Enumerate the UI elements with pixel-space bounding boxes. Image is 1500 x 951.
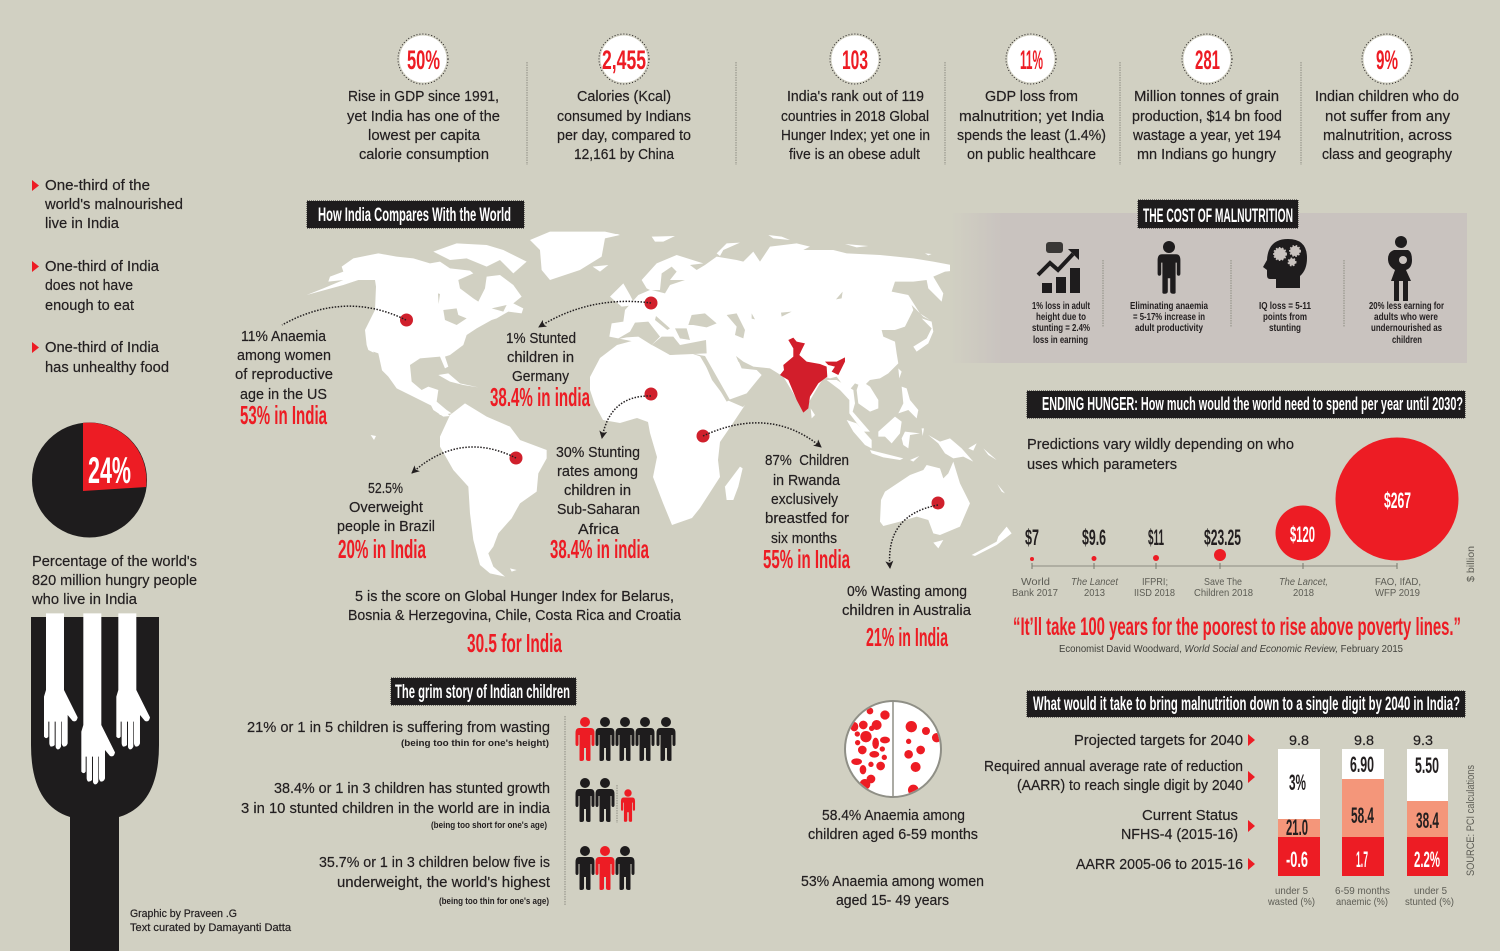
fact: unhealthy food: One-third of India: [45, 340, 160, 356]
fact: malnourished: One-third of the: [45, 178, 150, 194]
map callout: Rwanda: 55% in India: [763, 544, 850, 574]
bubble chart: $267: [1384, 488, 1411, 513]
map callout: Rwanda: six months: [771, 531, 837, 547]
bubble chart: 2018: [1293, 587, 1314, 599]
icons: 1 in 3 stunted: [576, 778, 635, 823]
credits: [130, 908, 291, 934]
bubble chart: FAO, IfAD,: [1375, 576, 1421, 588]
pie caption: 820 million hungry people: [32, 573, 197, 589]
text: stunted: 38.4% or 1 in 3 children has stunted growth: [274, 781, 550, 797]
stat: 9%: [1315, 34, 1459, 163]
map callout: Rwanda: exclusively: [771, 492, 839, 508]
cost text: anaemia: [1130, 300, 1208, 334]
stat: 281: Million tonnes of grain: [1134, 89, 1279, 105]
world map: [307, 232, 1012, 577]
stat: 2,455: per day, compared to: [557, 128, 691, 144]
stacked bars: 1.7: [1356, 847, 1368, 872]
fact: not enough to eat: One-third of India: [45, 259, 160, 275]
bubble chart: $120: [1290, 522, 1315, 547]
icon: head with gears: [1263, 239, 1307, 288]
stat: 103: [781, 34, 930, 163]
text: stunted: 3 in 10 stunted children in the world are in india: [241, 801, 551, 817]
fact: malnourished: [32, 178, 183, 232]
cost text: height: loss in earning: [1033, 334, 1088, 346]
stat: 103: 103: [842, 45, 868, 75]
map callout: Sub-Saharan Africa: rates among: [557, 464, 638, 480]
map callout: Sub-Saharan Africa: 38.4% in india: [550, 534, 649, 564]
cost text: height: height due to: [1036, 311, 1086, 323]
bubble chart: The Lancet: [1071, 576, 1119, 588]
stat: 50%: [347, 34, 500, 163]
text: stunted: (being too short for one's age): [431, 820, 547, 831]
pie caption: who live in India: [31, 592, 138, 608]
stat: 50%: 50%: [407, 45, 440, 75]
map callout: Australia: [842, 584, 972, 652]
map callout: Sub-Saharan Africa: 30% Stunting: [556, 445, 640, 461]
map callout: US: 11% Anaemia: [241, 329, 327, 345]
map callout: Brazil: 52.5%: [368, 481, 403, 497]
stacked bars: 9.3: [1413, 733, 1433, 748]
stat: 11%: on public healthcare: [967, 147, 1096, 163]
map callout: Australia: 21% in India: [866, 622, 948, 652]
stat: 9%: class and geography: [1322, 147, 1453, 163]
pie chart: 24%: [32, 422, 147, 538]
stat: 2,455: 12,161 by China: [574, 147, 675, 163]
stacked bars: 58.4: [1351, 803, 1374, 828]
map callout: Brazil: [337, 481, 435, 564]
panel: single digit by 2040: [984, 691, 1477, 908]
text: anaemia in women: aged 15- 49 years: [836, 893, 949, 909]
map callout: Germany: [490, 331, 590, 412]
stacked bars: 9.8: [1289, 733, 1309, 748]
cost text: height: stunting = 2.4%: [1032, 322, 1090, 334]
cost text: earnings: [1369, 300, 1444, 346]
icon: fork with reaching hands: [31, 613, 159, 951]
callout: Global Hunger Index: 5 is the score on Global Hunger Index for Belarus,: [355, 589, 674, 605]
map callout: Australia: children in Australia: [842, 603, 972, 619]
stat: 103: India's rank out of 119: [787, 89, 924, 105]
stat: 281: wastage a year, yet 194: [1132, 128, 1281, 144]
stat: 50%: lowest per capita: [368, 128, 481, 144]
stacked bars: 21.0: [1286, 815, 1308, 840]
bar labels: [1267, 885, 1454, 908]
bubble chart: IFPRI;: [1142, 576, 1168, 588]
panel: top statistics: [347, 34, 1459, 163]
stat: 11%: [957, 34, 1106, 163]
stat: 11%: GDP loss from: [985, 89, 1078, 105]
row labels: Projected targets for 2040: [1074, 733, 1243, 749]
row labels: Current Status: [1142, 808, 1238, 824]
icons: 1 in 5 people: [576, 717, 676, 761]
stat: 11%: spends the least (1.4%): [957, 128, 1106, 144]
credits: Text curated by Damayanti Datta: [130, 922, 291, 934]
icon: person: [1158, 241, 1180, 294]
stat: 281: mn Indians go hungry: [1137, 147, 1277, 163]
map: Africa: [590, 338, 745, 525]
cost text: height: [1032, 300, 1090, 346]
bubble chart: WFP 2019: [1375, 587, 1420, 599]
pie caption: [31, 554, 197, 608]
heading: How India Compares: [307, 201, 524, 228]
fact: malnourished: live in India: [45, 216, 120, 232]
bubble chart: [1012, 438, 1477, 599]
map callout: Rwanda: [763, 453, 850, 574]
stacked bars: 38.4: [1416, 808, 1439, 833]
text: wasting: (being too thin for one's height): [401, 738, 549, 749]
cost text: earnings: 20% less earning for: [1369, 300, 1444, 312]
stacked bars: 5.50: [1415, 753, 1439, 778]
stat: 9%: not suffer from any: [1325, 109, 1451, 125]
icon: chart with arrow and coins: [1038, 242, 1080, 293]
text: underweight: (being too thin for one's age): [439, 896, 549, 907]
text: underweight: [319, 855, 550, 907]
stat: 11%: 11%: [1020, 45, 1043, 75]
text: anaemia in women: 53% Anaemia among women: [801, 874, 984, 890]
panel: grim story of Indian children: [241, 678, 676, 907]
text: underweight: underweight, the world's highest: [337, 875, 550, 891]
icons: 1 in 3 underweight: [576, 846, 634, 890]
bar labels: 6-59 months: [1335, 885, 1390, 897]
bar labels: anaemic (%): [1336, 896, 1388, 908]
map callout: Brazil: people in Brazil: [337, 519, 435, 535]
heading: cost: THE COST OF MALNUTRITION: [1143, 206, 1293, 227]
row labels: Required annual average rate of reduction: [984, 759, 1243, 775]
map callout: Germany: 1% Stunted: [506, 331, 576, 347]
bar labels: under 5: [1275, 885, 1308, 897]
stat: 2,455: [557, 34, 691, 163]
row labels: [984, 733, 1255, 873]
map callout: US: 53% in India: [240, 400, 327, 430]
cost text: IQ: [1259, 300, 1311, 334]
map callout: Germany: Germany: [512, 369, 570, 385]
quote: [1013, 613, 1461, 655]
stat: 103: countries in 2018 Global: [781, 109, 929, 125]
fact: not enough to eat: does not have: [45, 278, 133, 294]
cost text: IQ: points from: [1263, 311, 1307, 323]
row labels: (AARR) to reach single digit by 2040: [1017, 778, 1243, 794]
map callout: Australia: 0% Wasting among: [847, 584, 967, 600]
bubble chart: $ billion: [1465, 546, 1477, 582]
stat: 2,455: 2,455: [602, 45, 646, 75]
fact: not enough to eat: [32, 259, 160, 314]
panel: ending hunger: [1012, 391, 1477, 655]
fact: malnourished: world's malnourished: [44, 197, 183, 213]
map markers and arrows: [282, 296, 944, 568]
stacked bars: 3%: [1289, 770, 1306, 795]
source: SOURCE: PCI calculations: [1465, 765, 1477, 876]
stat: 9%: Indian children who do: [1315, 89, 1459, 105]
text: anaemia in children: children aged 6-59 months: [808, 827, 978, 843]
quote: Economist David Woodward, World Social and Economic Review, February 2015: [1059, 643, 1403, 655]
cost text: height: 1% loss in adult: [1032, 300, 1090, 312]
panel: one-third facts: [32, 178, 183, 376]
heading: cost: [1138, 200, 1298, 228]
map callout: US: of reproductive: [235, 367, 333, 383]
text: stunted: [241, 781, 551, 831]
heading: grim story: The grim story of Indian children: [395, 682, 570, 703]
heading: grim story: [391, 678, 576, 705]
stat: 50%: Rise in GDP since 1991,: [348, 89, 499, 105]
stacked bars: 2.2%: [1414, 847, 1440, 872]
stat: 11%: malnutrition; yet India: [959, 109, 1105, 125]
stacked bars: 9.8: [1354, 733, 1374, 748]
cost text: anaemia: adult productivity: [1135, 322, 1203, 334]
map: southeast Asia and Oceania: [811, 380, 1012, 556]
text: wasting: [247, 720, 550, 749]
map callout: Sub-Saharan Africa: Sub-Saharan: [557, 502, 640, 518]
map callout: Germany: 38.4% in india: [490, 382, 590, 412]
cost text: earnings: undernourished as: [1371, 322, 1442, 334]
icon: blood cells comparison: [845, 701, 941, 797]
map callout: US: [235, 329, 333, 430]
stat: 281: 281: [1195, 45, 1220, 75]
cost text: IQ: stunting: [1269, 322, 1301, 334]
cost text: anaemia: = 5-17% increase in: [1133, 311, 1205, 323]
text: anaemia in children: [808, 808, 978, 843]
stat: 50%: calorie consumption: [359, 147, 489, 163]
bubble chart: World: [1021, 576, 1050, 588]
bar labels: under 5: [1414, 885, 1447, 897]
intro text: uses which parameters: [1027, 457, 1177, 473]
callout: Global Hunger Index: [348, 589, 682, 658]
bubble chart: The Lancet,: [1279, 576, 1328, 588]
stat: 281: production, $14 bn food: [1132, 109, 1282, 125]
icon: mother with child: [1388, 236, 1412, 301]
row labels: AARR 2005-06 to 2015-16: [1076, 857, 1243, 873]
map callout: US: among women: [237, 348, 331, 364]
bubble chart: Children 2018: [1194, 587, 1253, 599]
map callout: Brazil: 20% in India: [338, 534, 426, 564]
panel: cost of malnutrition: [950, 200, 1467, 363]
stat: 9%: malnutrition, across: [1323, 128, 1452, 144]
bubble chart: Save The: [1204, 576, 1242, 588]
map callout: Sub-Saharan Africa: children in: [564, 483, 631, 499]
map callout: Rwanda: in Rwanda: [773, 473, 841, 489]
intro text: [1027, 437, 1294, 473]
stat: 2,455: Calories (Kcal): [577, 89, 671, 105]
heading: How India Compares: How India Compares With the World: [318, 205, 511, 226]
bubble chart: $23.25: [1204, 525, 1241, 550]
intro text: Predictions vary wildly depending on who: [1027, 437, 1294, 453]
bar labels: wasted (%): [1267, 896, 1315, 908]
credits: Graphic by Praveen .G: [130, 908, 237, 920]
stacked bars: 6.90: [1350, 752, 1374, 777]
map callout: Sub-Saharan Africa: Africa: [578, 522, 620, 538]
bubble chart: Bank 2017: [1012, 587, 1058, 599]
pie chart: 24%: 24%: [88, 450, 131, 491]
bubble chart: IISD 2018: [1134, 587, 1175, 599]
stacked bars: -0.6: [1286, 847, 1308, 872]
map callout: Brazil: Overweight: [349, 500, 423, 516]
cost text: earnings: children: [1392, 334, 1422, 346]
stacked bars: [1278, 733, 1448, 876]
bubble chart: $7: [1025, 525, 1039, 550]
fact: unhealthy food: [32, 340, 169, 376]
bubble chart: 2013: [1084, 587, 1105, 599]
map: India in red: [780, 338, 845, 413]
map callout: Rwanda: breastfed for: [765, 511, 849, 527]
bar labels: stunted (%): [1405, 896, 1454, 908]
stat: 103: five is an obese adult: [789, 147, 920, 163]
fact: not enough to eat: enough to eat: [45, 298, 134, 314]
text: underweight: 35.7% or 1 in 3 children below five is: [319, 855, 550, 871]
map callout: Sub-Saharan Africa: [550, 445, 649, 564]
row labels: NFHS-4 (2015-16): [1121, 827, 1238, 843]
cost text: IQ: IQ loss = 5-11: [1259, 300, 1311, 312]
text: anaemia in children: 58.4% Anaemia among: [822, 808, 965, 824]
bubble chart: $11: [1148, 525, 1164, 550]
callout: Global Hunger Index: Bosnia & Herzegovina, Chile, Costa Rica and Croatia: [348, 608, 682, 624]
fact: unhealthy food: has unhealthy food: [45, 360, 169, 376]
stat: 2,455: consumed by Indians: [557, 109, 691, 125]
callout: Global Hunger Index: 30.5 for India: [467, 628, 562, 658]
stat: 103: Hunger Index; yet one in: [781, 128, 930, 144]
map callout: Rwanda: 87% Children: [765, 453, 849, 469]
bubble chart: $9.6: [1082, 525, 1106, 550]
stat: 281: [1132, 34, 1282, 163]
text: anaemia in women: [801, 874, 984, 909]
stat: 50%: yet India has one of the: [347, 109, 500, 125]
cost text: anaemia: Eliminating anaemia: [1130, 300, 1208, 312]
text: wasting: 21% or 1 in 5 children is suffering from wasting: [247, 720, 550, 736]
stat: 9%: 9%: [1376, 45, 1398, 75]
map callout: Germany: children in: [507, 350, 574, 366]
pie caption: Percentage of the world's: [32, 554, 197, 570]
cost text: earnings: adults who were: [1374, 311, 1438, 323]
map callout: US: age in the US: [240, 387, 327, 403]
